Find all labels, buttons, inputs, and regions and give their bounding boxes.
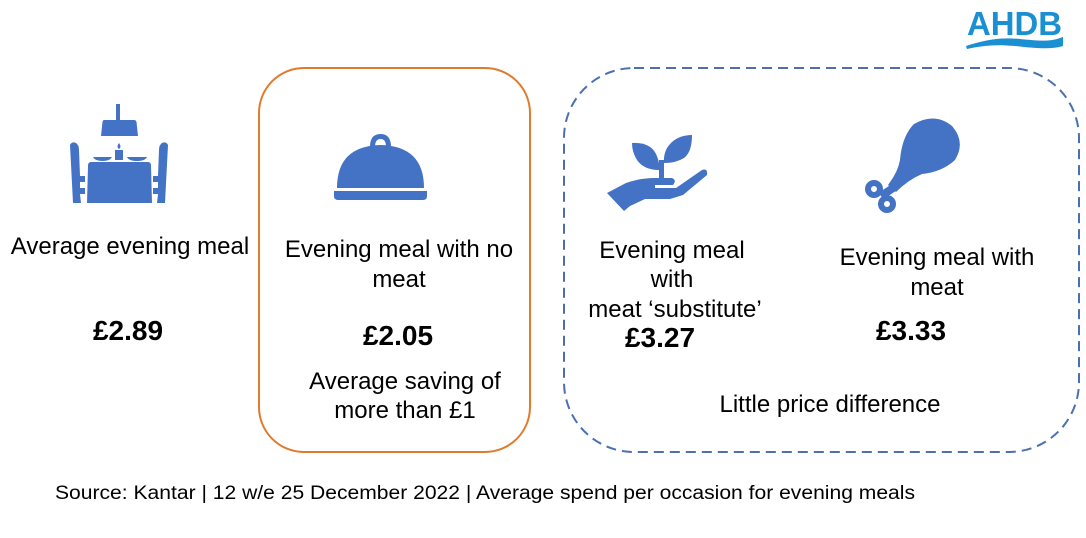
text: average evening meal — [11, 233, 249, 346]
text: meat substitute — [588, 237, 762, 353]
text: meat substitute: £3.27 — [625, 322, 695, 353]
text: little price difference: Little price difference — [719, 391, 941, 418]
logo: AHDB: AHDB — [967, 5, 1062, 42]
icon: cloche — [334, 134, 427, 200]
icon: drumstick — [868, 118, 960, 210]
icon: dining table — [70, 104, 168, 203]
text: average evening meal: £2.89 — [93, 315, 163, 346]
text: meat: meat — [910, 274, 964, 301]
text: no meat: £2.05 — [363, 320, 433, 351]
icon: hand with plant — [607, 135, 707, 211]
source: Source: Kantar | 12 w/e 25 December 2022 | Average spend per occasion for evening meals — [55, 483, 915, 504]
text: no meat: Evening meal with no — [285, 236, 513, 263]
text: no meat: meat — [372, 266, 426, 293]
text: no meat: Average saving of — [309, 368, 501, 395]
text: no meat — [285, 236, 513, 424]
text: meat: £3.33 — [876, 315, 946, 346]
panel: meat comparison (dashed) — [564, 68, 1079, 452]
text: meat substitute: with — [650, 266, 693, 293]
text: meat substitute: meat ‘substitute’ — [588, 296, 762, 323]
panel: no meat (orange) — [259, 68, 530, 452]
text: meat substitute: Evening meal — [599, 237, 745, 264]
text: meat: Evening meal with — [840, 244, 1034, 271]
text: no meat: more than £1 — [334, 397, 476, 424]
text: average evening meal: Average evening meal — [11, 233, 249, 260]
text: meat — [840, 244, 1034, 346]
